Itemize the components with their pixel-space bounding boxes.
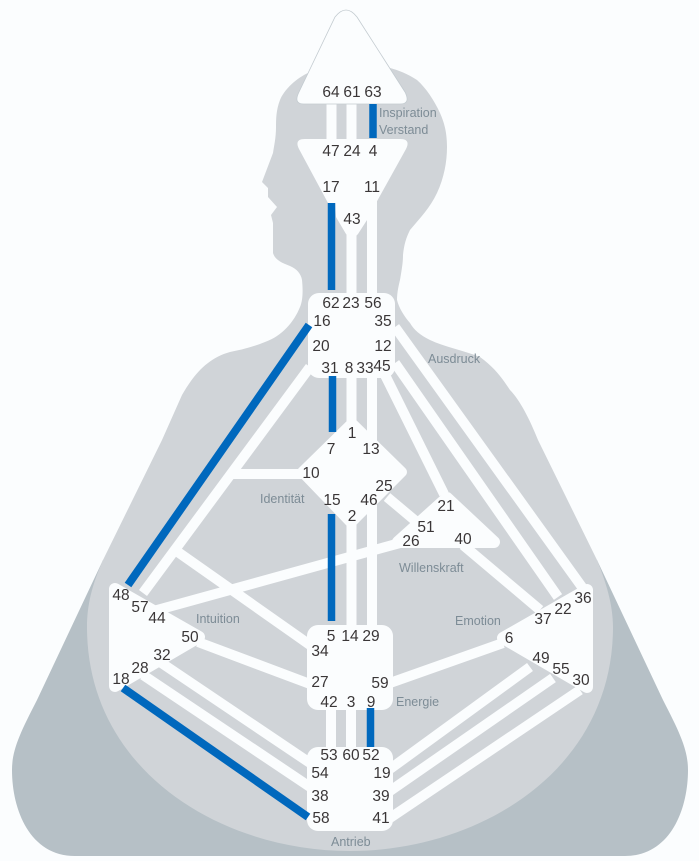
gate numbers: head and ajna: 17	[322, 179, 340, 196]
gate numbers: sacral: 42	[320, 694, 338, 711]
center: sacral square	[307, 625, 393, 710]
gate numbers: ego: 26	[402, 533, 420, 550]
center labels: Emotion	[455, 614, 501, 628]
gate numbers: root: 19	[373, 765, 391, 782]
gate numbers: G center	[302, 425, 393, 525]
gate numbers: G center: 2	[348, 508, 356, 525]
gate numbers: sacral: 29	[362, 628, 380, 645]
center: solar plexus triangle	[503, 590, 587, 687]
gate numbers: throat: 62	[322, 295, 340, 312]
gate numbers: root	[311, 747, 391, 827]
center labels: Identität	[260, 492, 305, 506]
gate numbers: G center: 10	[302, 465, 320, 482]
gate numbers: spleen: 57	[131, 599, 149, 616]
gate numbers: throat: 31	[321, 360, 339, 377]
gate numbers: throat: 56	[364, 295, 382, 312]
gate numbers: throat: 16	[313, 313, 331, 330]
gate numbers: head and ajna: 43	[343, 211, 361, 228]
center: root square	[307, 747, 393, 831]
gate numbers: root: 38	[311, 788, 329, 805]
gate numbers: head and ajna: 63	[364, 84, 382, 101]
gate numbers: throat: 12	[374, 338, 392, 355]
gate numbers: solar plexus: 37	[534, 611, 552, 628]
background: dark rounded triangle	[12, 560, 688, 856]
gate numbers: root: 54	[311, 765, 329, 782]
gate numbers: G center: 13	[362, 441, 380, 458]
gate numbers: root: 41	[372, 810, 390, 827]
gate numbers: solar plexus: 49	[532, 650, 550, 667]
gate numbers: solar plexus: 36	[574, 590, 592, 607]
center labels	[196, 106, 501, 849]
gate numbers: sacral: 3	[347, 694, 355, 711]
gate numbers: throat: 35	[374, 313, 392, 330]
gate numbers: throat: 23	[342, 295, 360, 312]
gate numbers: sacral	[311, 628, 389, 711]
gate numbers: sacral: 5	[327, 628, 335, 645]
gate numbers: head and ajna: 24	[343, 143, 361, 160]
gate numbers: throat: 45	[373, 358, 391, 375]
gate numbers: solar plexus: 22	[554, 601, 572, 618]
gate numbers: root: 52	[362, 747, 380, 764]
center labels: Intuition	[196, 612, 240, 626]
gate numbers: throat: 33	[356, 360, 374, 377]
gate numbers: head and ajna: 61	[343, 84, 361, 101]
center: ajna triangle	[297, 139, 408, 238]
white channels	[143, 104, 582, 818]
gate numbers: solar plexus: 6	[505, 630, 513, 647]
gate numbers: head and ajna: 11	[364, 179, 380, 196]
center labels: Verstand	[379, 123, 428, 137]
center: ego heart triangle	[398, 498, 494, 542]
gate numbers: root: 58	[312, 810, 330, 827]
gate numbers: ego: 40	[454, 531, 472, 548]
gate numbers: root: 60	[342, 747, 360, 764]
gate numbers: spleen: 44	[148, 610, 166, 627]
gate numbers: sacral: 34	[311, 643, 329, 660]
gate numbers: spleen: 32	[153, 647, 171, 664]
gate numbers: spleen: 18	[112, 671, 130, 688]
gate numbers: throat: 20	[312, 338, 330, 355]
gate numbers: root: 39	[372, 788, 390, 805]
gate numbers: throat	[312, 295, 392, 377]
gate numbers: sacral: 27	[311, 674, 329, 691]
gate numbers: head and ajna: 47	[322, 143, 340, 160]
gate numbers: ego	[402, 498, 472, 550]
gate numbers: spleen	[112, 587, 199, 688]
gate numbers: solar plexus: 55	[552, 661, 570, 678]
center: G diamond	[302, 423, 402, 523]
gate numbers: spleen: 28	[131, 660, 149, 677]
gate numbers: spleen: 50	[181, 629, 199, 646]
gate numbers: sacral: 9	[367, 694, 375, 711]
gate numbers: head and ajna: 64	[322, 84, 340, 101]
blue activated channels	[123, 104, 373, 817]
gate numbers: solar plexus	[505, 590, 592, 689]
gate numbers: G center: 15	[323, 492, 341, 509]
gate numbers: throat: 8	[345, 360, 353, 377]
gate numbers: G center: 7	[327, 441, 335, 458]
gate numbers: ego: 51	[417, 519, 435, 536]
gate numbers: root: 53	[320, 747, 338, 764]
center: spleen triangle	[115, 589, 199, 686]
gate numbers: G center: 25	[375, 478, 393, 495]
gate numbers: head and ajna: 4	[369, 143, 378, 160]
center labels: Energie	[396, 695, 439, 709]
center labels: Antrieb	[331, 835, 371, 849]
gate numbers: ego: 21	[437, 498, 455, 515]
background: human body silhouette	[87, 60, 613, 851]
gate numbers: solar plexus: 30	[572, 672, 590, 689]
center: head triangle	[297, 10, 407, 104]
center labels: Inspiration	[379, 106, 437, 120]
gate numbers: G center: 46	[360, 492, 378, 509]
center: throat square	[308, 293, 395, 378]
gate numbers: sacral: 59	[371, 675, 389, 692]
gate numbers: head and ajna	[322, 84, 382, 228]
center labels: Willenskraft	[399, 561, 464, 575]
gate numbers: G center: 1	[348, 425, 356, 442]
center labels: Ausdruck	[428, 352, 481, 366]
gate numbers: spleen: 48	[112, 587, 130, 604]
gate numbers: sacral: 14	[341, 628, 359, 645]
